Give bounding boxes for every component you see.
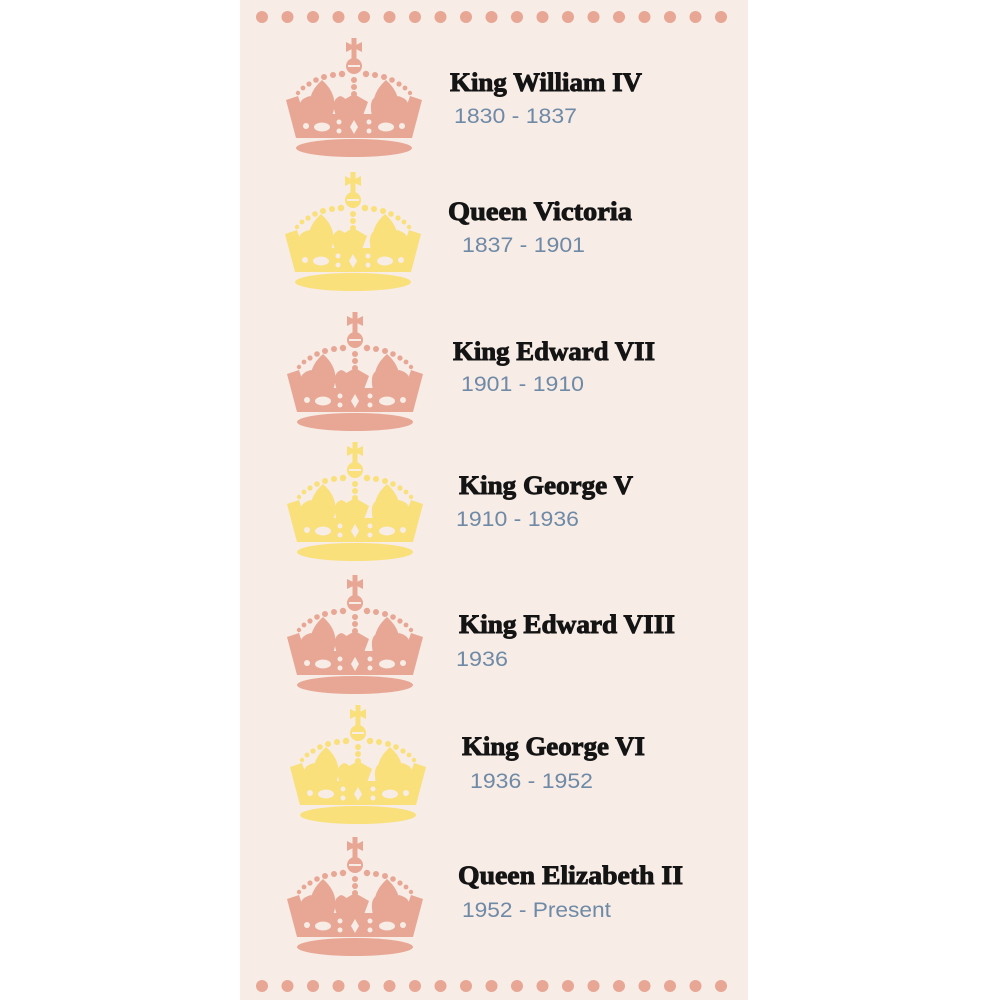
label: Victoria: Queen Victoria xyxy=(448,197,632,226)
label: George V xyxy=(456,471,633,531)
crown: William IV xyxy=(286,38,422,157)
crown: Edward VIII xyxy=(287,575,423,694)
label: Edward VII: 1901 - 1910 xyxy=(461,373,584,396)
label: Edward VIII: King Edward VIII xyxy=(459,610,675,639)
crown: Elizabeth II xyxy=(287,837,423,956)
label: Elizabeth II: Queen Elizabeth II xyxy=(458,861,683,890)
panel background xyxy=(240,0,748,1000)
label: William IV xyxy=(450,68,642,128)
crown: Edward VII xyxy=(287,312,423,431)
crown: George V xyxy=(287,442,423,561)
label: Elizabeth II xyxy=(458,861,683,922)
label: George VI: 1936 - 1952 xyxy=(470,770,593,793)
label: Victoria xyxy=(448,197,632,257)
label: George VI xyxy=(462,732,645,793)
label: Edward VIII: 1936 xyxy=(456,648,508,671)
crown: George VI xyxy=(290,705,426,824)
crown: Victoria xyxy=(285,172,421,291)
label: William IV: King William IV xyxy=(450,68,642,97)
label: Edward VIII xyxy=(456,610,675,671)
bottom dot border xyxy=(256,980,727,992)
label: Edward VII xyxy=(453,337,655,396)
label: William IV: 1830 - 1837 xyxy=(454,105,577,128)
label: George V: 1910 - 1936 xyxy=(456,508,579,531)
label: Victoria: 1837 - 1901 xyxy=(462,234,585,257)
label: Elizabeth II: 1952 - Present xyxy=(462,899,611,922)
top dot border xyxy=(256,11,727,23)
label: George V: King George V xyxy=(459,471,633,500)
label: George VI: King George VI xyxy=(462,732,645,761)
label: Edward VII: King Edward VII xyxy=(453,337,655,366)
